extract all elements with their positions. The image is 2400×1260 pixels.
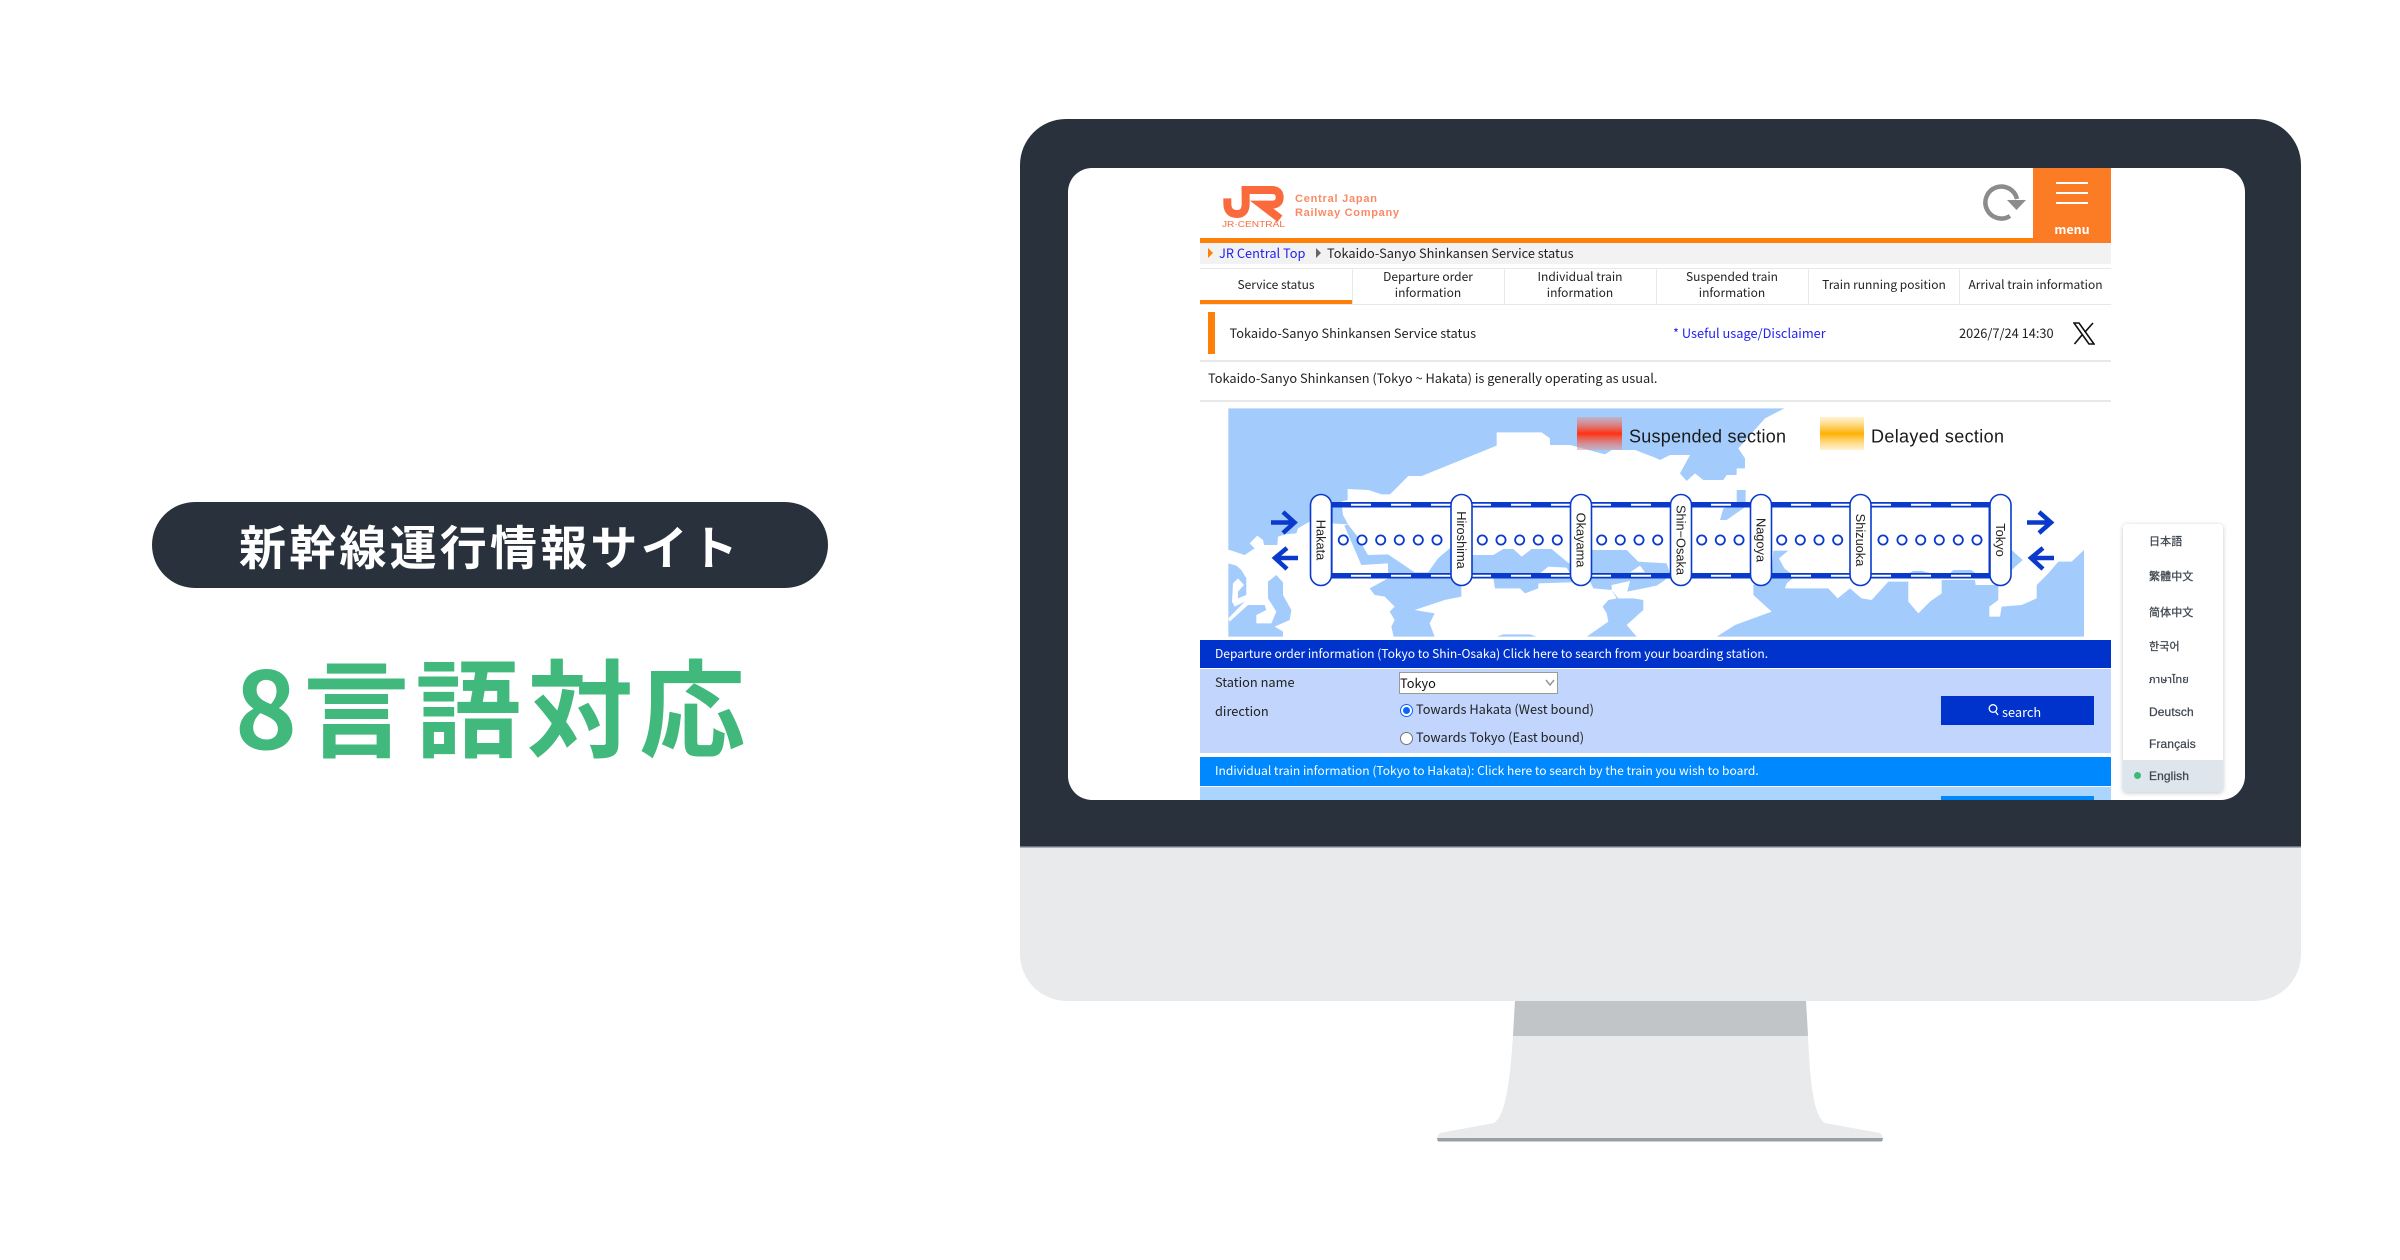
orange header line [1200, 238, 2111, 243]
panel: monitor screen: 简体中文 [2149, 607, 2193, 619]
status title row [1200, 312, 2111, 362]
heading pill: 新幹線運行情報サイト [152, 502, 828, 588]
heading pill: 新幹線運行情報サイト: 新幹線運行情報サイト [239, 510, 741, 579]
search button [1941, 696, 2094, 725]
station pills with names: Hakata [1314, 520, 1328, 561]
station pills with names: Okayama [1574, 513, 1588, 568]
tab bar: Suspended train [1686, 268, 1778, 285]
tab bar: information [1699, 284, 1765, 301]
tab bar: Service status [1237, 276, 1315, 293]
tab bar [1200, 268, 2111, 305]
status title row: 2026/7/24 14:30 [1959, 323, 2054, 342]
station select: Tokyo [1400, 673, 1436, 692]
tab bar: information [1395, 284, 1461, 301]
legend: suspended and delayed sections: Delayed section [1871, 426, 2004, 446]
station pills with names: Tokyo [1993, 523, 2008, 557]
section header: individual train: Individual train information (Tokyo to Hakata): Click here to search by the train you wish to board. [1215, 762, 1759, 779]
status title row: * Useful usage/Disclaimer [1673, 323, 1826, 342]
panel: monitor screen: English [2149, 769, 2189, 783]
map of western Japan [1228, 408, 2084, 637]
direction arrows [1271, 512, 2054, 569]
tab bar: Departure order [1383, 268, 1473, 285]
tab bar: Train running position [1822, 276, 1946, 293]
station select [1399, 672, 1558, 694]
panel: left headline block [152, 502, 828, 780]
station dots [1339, 535, 1982, 545]
status title row: Tokaido-Sanyo Shinkansen Service status [1230, 323, 1476, 342]
section header: departure order [1200, 640, 2111, 668]
station pills with names: Hiroshima [1454, 511, 1469, 570]
monitor stand [1437, 1000, 1883, 1142]
panel: monitor screen [1068, 168, 2244, 800]
site logo: JR Central: Central Japan [1295, 193, 1377, 205]
tab bar: Arrival train information [1968, 276, 2103, 293]
section header: individual train [1200, 757, 2111, 786]
tab bar: information [1547, 284, 1613, 301]
station pills with names: Shizuoka [1853, 514, 1868, 567]
panel: monitor screen: 繁體中文 [2149, 571, 2193, 583]
site logo: JR Central: JR·CENTRAL [1222, 219, 1285, 229]
site logo: JR Central: Railway Company [1295, 207, 1400, 219]
panel: monitor screen: ภาษาไทย [2149, 674, 2189, 686]
panel: monitor screen: 한국어 [2149, 641, 2180, 653]
site logo: JR Central [1222, 186, 1400, 229]
search form [1200, 669, 2111, 753]
monitor chin [1020, 847, 2301, 1001]
section header: departure order: Departure order information (Tokyo to Shin-Osaka) Click here to search from your boarding station. [1215, 645, 1768, 662]
radio options: Towards Tokyo (East bound) [1416, 727, 1584, 746]
status message: Tokaido-Sanyo Shinkansen (Tokyo ~ Hakata) is generally operating as usual. [1208, 368, 1657, 387]
menu button [2033, 168, 2111, 243]
search form: direction [1215, 701, 1269, 720]
legend: suspended and delayed sections: Suspended section [1629, 426, 1786, 446]
menu button: menu [2054, 219, 2090, 238]
individual train form [1200, 787, 2111, 807]
station pills with names: Shin−Osaka [1674, 505, 1688, 576]
language selector [2123, 524, 2223, 792]
panel: monitor screen: 日本語 [2149, 536, 2182, 548]
tab bar: Individual train [1538, 268, 1622, 285]
station pills with names [1310, 494, 2011, 586]
breadcrumb [1200, 243, 2111, 264]
search button: search [2002, 702, 2041, 721]
legend: suspended and delayed sections [1577, 417, 2004, 450]
panel: monitor screen: Deutsch [2149, 705, 2194, 719]
radio options [1400, 699, 1594, 746]
breadcrumb: Tokaido-Sanyo Shinkansen Service status [1327, 243, 1574, 262]
Shinkansen rail lines [1325, 502, 1995, 578]
search form: Station name [1215, 672, 1295, 691]
monitor bezel [1020, 119, 2301, 847]
icon: reload [1983, 184, 2026, 221]
station pills with names: Nagoya [1754, 518, 1768, 563]
title: 8言語対応: 8言語対応 [235, 626, 751, 780]
panel: monitor screen: Français [2149, 737, 2196, 751]
radio options: Towards Hakata (West bound) [1416, 699, 1594, 718]
breadcrumb: JR Central Top [1219, 243, 1305, 262]
